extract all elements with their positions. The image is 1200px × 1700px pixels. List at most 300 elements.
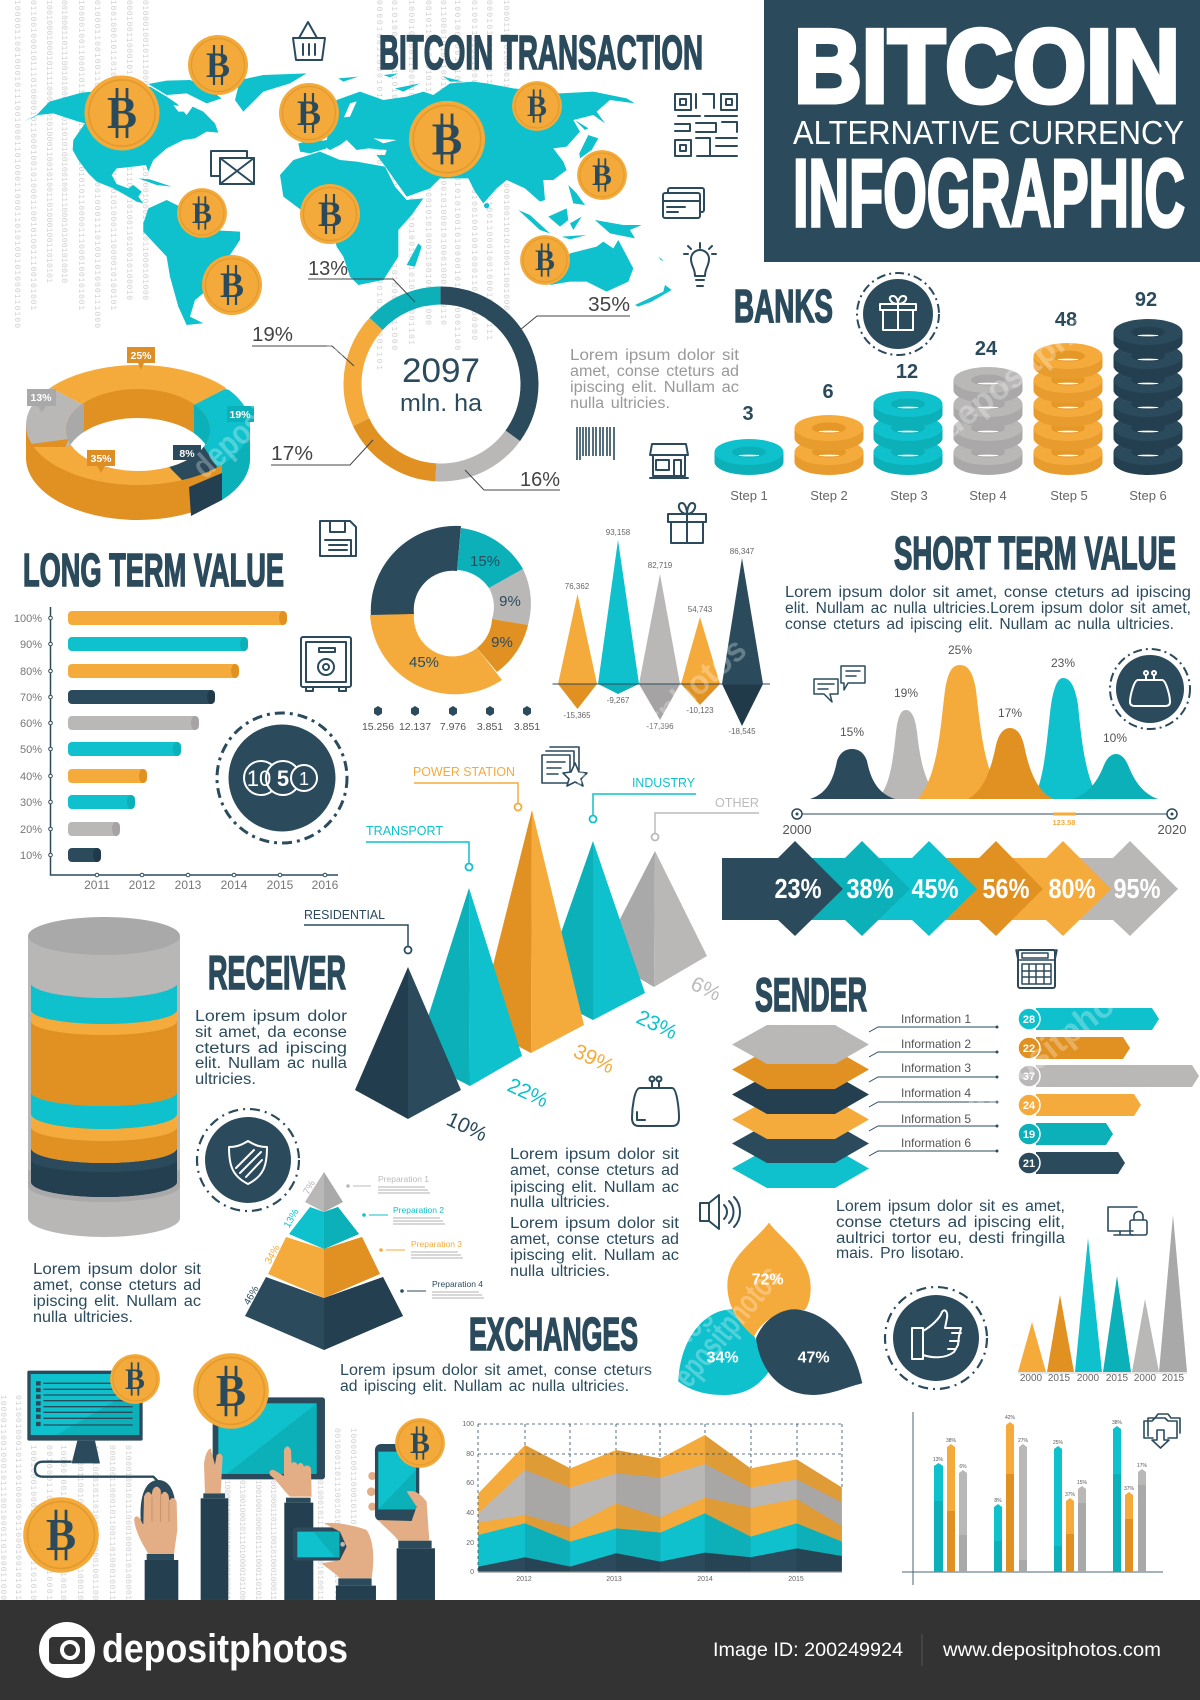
bell curve chart: 17% (998, 706, 1022, 720)
layered pyramid chart: 13% (282, 1207, 302, 1230)
bell curve chart (810, 643, 1158, 799)
horizontal bar chart: 10% (20, 850, 42, 862)
information leader lines: Information 6 (901, 1136, 971, 1150)
arrow bars: 21 (1023, 1158, 1035, 1170)
percent labels: 22% (504, 1074, 552, 1112)
icon: shop (650, 444, 688, 478)
text block: center lorem 2: nulla ultricies. (510, 1263, 610, 1280)
callout: 13%: 13% (30, 392, 52, 404)
text block: receiver: ultricies. (195, 1071, 256, 1088)
horizontal bar chart: 20% (20, 824, 42, 836)
stack: step 4: 24 (975, 338, 998, 360)
label: residential: RESIDENTIAL (304, 908, 385, 922)
watermark overlays: depositphotos (565, 630, 754, 806)
binary code background bottom-left: 011001000101110100001011000100101011 (13, 1395, 22, 1600)
text block: center lorem 2: ipiscing elit. Nullam ac (510, 1247, 679, 1264)
icon: gift (668, 503, 706, 543)
icon: folder download (1144, 1414, 1180, 1448)
grouped bar chart: 17% (1137, 1463, 1148, 1469)
binary code background bottom-left: 10010001011010010010001001100 (90, 1445, 99, 1600)
binary code background top-left: 01100100010111010000101100010010100011001010011100101001 (28, 0, 37, 310)
arrow percent band (722, 841, 1178, 936)
heading: receiver: RECEIVER (208, 946, 346, 999)
stack: step 1 (714, 403, 784, 503)
binary code background bottom-left: 10000100110001011010001001001101 (348, 1428, 357, 1600)
icon badge: coins (217, 713, 347, 843)
layered pyramid chart (242, 1172, 484, 1350)
stack: step 6 (1114, 289, 1182, 503)
spike chart: 76,362 (565, 582, 590, 591)
grouped bar chart: 13% (933, 1457, 944, 1463)
horizontal bar chart: 30% (20, 797, 42, 809)
text block: center lorem 2 (510, 1215, 680, 1280)
hands (134, 1446, 429, 1578)
coins (23, 1353, 445, 1573)
arrow percent band: 56% (982, 873, 1030, 904)
watermark overlays: depositphotos (657, 1258, 789, 1405)
icon badge: coins: 1 (299, 769, 309, 789)
triangle chart: 2000 (1020, 1373, 1043, 1384)
percent labels: 6% (687, 972, 724, 1006)
label: 19%: 19% (252, 324, 293, 346)
spike chart (552, 528, 770, 736)
horizontal bar chart: 2013 (175, 878, 202, 892)
grouped bar chart: 42% (1005, 1415, 1016, 1421)
text block: short term value: elit. Nullam ac nulla ultricies.Lorem ipsum dolor sit amet, (785, 600, 1191, 617)
text block: sender lorem: aultrici tortor eu, desti fringilla (836, 1230, 1065, 1247)
3d donut chart (26, 347, 254, 520)
bell curve chart: 10% (1103, 731, 1127, 745)
icon: mouse (140, 1480, 175, 1525)
arrow bars: 37 (1023, 1071, 1035, 1083)
binary code background bottom-left: 0010001101110010100010001 (44, 1445, 53, 1600)
binary code background top-left: 10010001000101111000110101000110010100110100010011010101 (44, 0, 53, 283)
layered pyramid chart: 7% (301, 1179, 318, 1197)
layered pyramid chart: 34% (263, 1243, 283, 1266)
spike chart: -17,396 (646, 722, 674, 731)
label: preparation 2 (362, 1205, 445, 1224)
timeline: 2000 (783, 822, 811, 837)
label: 13% (308, 258, 415, 302)
stacked area chart: 2013 (606, 1576, 622, 1583)
grouped bar chart: 15% (1077, 1480, 1088, 1486)
binary code background top-left: 10000100110001011010001001001101010110000111000100101001 (76, 0, 85, 310)
binary code background top-center (374, 0, 510, 370)
horizontal bar chart: 2011 (84, 878, 110, 892)
stacked area chart: 2014 (697, 1576, 713, 1583)
text block: center lorem 2: Lorem ipsum dolor sit (510, 1215, 680, 1232)
horizontal bar chart: 2012 (129, 878, 156, 892)
coins: B (216, 1366, 246, 1416)
petal chart: 34% (707, 1349, 739, 1366)
label: 16%: 16% (520, 469, 560, 491)
bitcoin coins on map: B (592, 159, 612, 192)
horizontal bar chart: 80% (20, 666, 42, 678)
watermark overlays: depositphotos (566, 1298, 720, 1436)
icon badge: thumbs up (885, 1287, 987, 1389)
donut ring 2097: mln. ha (400, 390, 483, 417)
label: transport (366, 824, 472, 870)
binary code background top-center: 00001001100010111000110100101001100001010100101010001101 (374, 0, 383, 370)
stacked area chart: 0 (470, 1569, 474, 1576)
donut ring 2097: 2097 (402, 352, 480, 390)
horizontal bar chart: 60% (20, 718, 42, 730)
text block: receiver: sit amet, da econse (195, 1024, 347, 1041)
icon: monitor lock (1108, 1207, 1147, 1235)
timeline: 2020 (1158, 822, 1186, 837)
arrow bars: 22 (1023, 1043, 1035, 1055)
label: 16% (465, 469, 560, 491)
stack: step 4: Step 4 (969, 488, 1007, 503)
text block: center lorem 1 (510, 1146, 680, 1211)
binary code background bottom-left: 10000110010001011100100011 (222, 1480, 231, 1600)
pie donut chart: 15% (470, 553, 500, 570)
horizontal bar chart: 2016 (312, 878, 339, 892)
binary code background bottom-left: 10010001000101111000110101 (253, 1480, 262, 1600)
stack: step 5 (1034, 309, 1102, 503)
grouped bar chart: 37% (1065, 1492, 1076, 1498)
text block: sender lorem: conse cteturs ad ipiscing elit, (836, 1214, 1065, 1231)
timeline (783, 809, 1186, 837)
legend row: 3.851 (477, 721, 503, 733)
stacked area chart: 2015 (788, 1576, 804, 1583)
bitcoin coins on map: B (297, 93, 321, 133)
text block: short term value (785, 584, 1191, 633)
binary code background top-left: 01000110010011000101001100010100010001110100101000111000 (92, 0, 101, 328)
percent labels: 10% (443, 1108, 491, 1146)
triangle chart: 2000 (1134, 1373, 1157, 1384)
stacked area chart: 80 (466, 1451, 474, 1458)
binary code background top-center: 00010100010011010001101001010001010011000100100010100111 (484, 0, 493, 340)
text block: sender lorem (836, 1198, 1065, 1262)
bell curve chart: 19% (894, 686, 918, 700)
text block: grey lorem: amet, conse cteturs ad (570, 363, 739, 380)
legend row: 12.137 (399, 721, 431, 733)
timeline: 123.58 (1053, 818, 1075, 827)
label: 13%: 13% (308, 258, 348, 280)
binary code background bottom-left (0, 1395, 357, 1600)
text block: center lorem 2: amet, conse cteturs ad (510, 1231, 679, 1248)
information leader lines: Information 2 (901, 1037, 971, 1051)
bell curve chart: 15% (840, 725, 864, 739)
stack: step 3 (874, 361, 942, 503)
grouped bar chart: 6% (959, 1464, 967, 1470)
grouped bar chart: 38% (1112, 1420, 1123, 1426)
stacked area chart: 2012 (516, 1576, 532, 1583)
bitcoin coins on map: B (527, 90, 547, 123)
text block: sender lorem: Lorem ipsum dolor sit es amet, (836, 1198, 1065, 1215)
binary code background top-left: 10000110010001011100100011010001100011010100101000110100 (12, 0, 21, 328)
stacked area chart: 100 (462, 1421, 474, 1428)
stack: step 5: 48 (1055, 309, 1077, 331)
text block: receiver: cteturs ad ipiscing (195, 1040, 347, 1057)
text block: short term value: Lorem ipsum dolor sit amet, conse cteturs ad ipiscing (785, 584, 1191, 601)
label: preparation 3 (379, 1239, 463, 1258)
icon: wallet (632, 1076, 679, 1126)
bitcoin coins on map: B (192, 197, 212, 230)
text block: grey lorem: ipiscing elit. Nullam ac (570, 379, 739, 396)
pyramid: industry (540, 841, 645, 1020)
arrow bars: 24 (1023, 1100, 1036, 1112)
spike chart: 82,719 (648, 561, 673, 570)
text block: left lorem: amet, conse cteturs ad (33, 1277, 201, 1294)
grouped bar chart: 8% (994, 1498, 1002, 1504)
text block: center lorem 1: ipiscing elit. Nullam ac (510, 1179, 679, 1196)
label: 35% (520, 294, 630, 330)
stack: step 3: Step 3 (890, 488, 928, 503)
icon: monitor (27, 1371, 143, 1463)
pyramid: power station (478, 810, 584, 1053)
text block: receiver (195, 1008, 347, 1088)
label: power station: POWER STATION (413, 765, 515, 779)
text block: grey lorem: nulla ultricies. (570, 395, 670, 412)
bitcoin coins on map: B (107, 88, 137, 138)
cuffs (147, 1493, 432, 1586)
footer image id: Image ID: 200249924 (713, 1640, 903, 1661)
binary code background bottom-left: 01000100101110001000110100001 (123, 1445, 132, 1600)
pie donut chart: 9% (499, 593, 521, 610)
stack: step 2: Step 2 (810, 488, 848, 503)
arrow percent band: 38% (846, 873, 894, 904)
footer url: www.depositphotos.com (942, 1640, 1161, 1661)
bitcoin coins on map: B (220, 265, 244, 305)
stack: step 6: 92 (1135, 289, 1157, 311)
pie donut chart: 45% (409, 654, 439, 671)
text block: left lorem: ipiscing elit. Nullam ac (33, 1293, 201, 1310)
icon badge: coins: 10 (247, 766, 271, 791)
text block: receiver: Lorem ipsum dolor (195, 1008, 347, 1025)
legend row: 3.851 (514, 721, 540, 733)
grouped bar chart: 25% (1053, 1440, 1064, 1446)
finger blobs behind phone (367, 1472, 376, 1511)
percent labels (443, 972, 724, 1146)
callout: 8% (173, 445, 201, 460)
arrow percent band: 95% (1114, 873, 1161, 904)
binary code background bottom-left: 100100010001011110001101010 (28, 1445, 37, 1600)
text block: left lorem (33, 1261, 202, 1326)
horizontal bar chart: 90% (20, 639, 42, 651)
binary code background top-left: 10010001011010010010001001100011010101000111000010100101 (108, 0, 117, 310)
binary code background top-left: 01000100101110001000110100001011010010001101011000101000 (140, 0, 149, 300)
text block: exchanges: Lorem ipsum dolor sit amet, conse cteturs (340, 1362, 652, 1379)
icon badge: wallet (1110, 649, 1190, 729)
spike chart: -15,365 (563, 711, 591, 720)
icon: lightbulb (684, 243, 716, 286)
icon: calculator (1016, 950, 1057, 988)
icon: safe (301, 637, 351, 691)
text block: exchanges (340, 1362, 652, 1395)
footer bar (0, 1600, 1200, 1700)
binary code background top-center: 10010010010100010100101000110101010010100001010100001100 (452, 0, 461, 350)
binary code background bottom-left: 00010011000101100110100010011 (107, 1445, 116, 1600)
icon: qr code (675, 94, 737, 156)
3d pyramid chart (304, 765, 759, 1146)
label: power station (413, 765, 522, 810)
icon: speaker (700, 1195, 740, 1229)
icon badge: shield (197, 1109, 299, 1211)
label: 35%: 35% (588, 294, 630, 316)
text block: center lorem 1: nulla ultricies. (510, 1194, 610, 1211)
binary code background bottom-left: 00100011011100101000100011010011 (332, 1428, 341, 1600)
label: preparation 3: Preparation 3 (411, 1239, 462, 1249)
icon: chat bubbles (814, 666, 865, 702)
label: residential (304, 908, 412, 954)
title panel: ALTERNATIVE CURRENCY (793, 114, 1184, 151)
stacked area chart (462, 1421, 842, 1583)
petal chart: 72% (752, 1271, 784, 1288)
triangle chart: 2015 (1048, 1373, 1071, 1384)
footer logo (39, 1622, 348, 1678)
spike chart: 93,158 (606, 528, 631, 537)
grouped bar chart: 37% (1124, 1486, 1135, 1492)
horizontal bar chart: 2015 (267, 878, 294, 892)
arrow bars: 19 (1023, 1129, 1035, 1141)
pyramid: transport (415, 888, 522, 1086)
icon badge: coins: 5 (277, 766, 289, 791)
stack: step 2: 6 (822, 381, 834, 403)
heading: sender: SENDER (755, 968, 867, 1021)
icon: small phone (293, 1527, 347, 1561)
coin stacks chart (714, 289, 1182, 503)
binary code background top-left (12, 0, 149, 328)
bell curve chart: 25% (948, 643, 972, 657)
percent labels: 23% (633, 1006, 681, 1044)
information leader lines: Information 3 (901, 1061, 971, 1075)
binary code background bottom-left: 01000110010011000101001100010 (75, 1445, 84, 1600)
callout: 19%: 19% (229, 409, 251, 421)
text block: left lorem: nulla ultricies. (33, 1309, 133, 1326)
watermark overlays (185, 275, 1161, 1436)
bitcoin coins on map: B (318, 194, 342, 234)
triangle chart: 2015 (1106, 1373, 1129, 1384)
pie donut chart (362, 526, 540, 733)
callout: 25%: 25% (130, 350, 152, 362)
stack: step 3: 12 (896, 361, 918, 383)
horizontal bar chart: 100% (14, 613, 42, 625)
stack: step 4 (954, 338, 1022, 503)
hexagon stack (732, 1025, 869, 1188)
label: preparation 4: Preparation 4 (432, 1279, 483, 1289)
text block: grey lorem: Lorem ipsum dolor sit (570, 347, 740, 364)
text block: short term value: conse cteturs ad ipiscing elit. Nullam ac nulla ultricies. (785, 616, 1174, 633)
pie donut chart: 9% (491, 634, 513, 651)
text block: left lorem: Lorem ipsum dolor sit (33, 1261, 202, 1278)
label: preparation 1 (346, 1174, 430, 1193)
heading: banks: BANKS (734, 280, 833, 332)
binary code background top-left: 00010011000101100110100010011001110001010011010010100010 (124, 0, 133, 300)
world map (23, 73, 672, 325)
cylinder chart (28, 917, 180, 1237)
binary code background top-center: 01001101001000110010001010001010100100100100011011100000 (469, 0, 478, 340)
legend row: 7.976 (440, 721, 466, 733)
coins: B (125, 1363, 145, 1396)
spike chart: 54,743 (688, 605, 713, 614)
callout: 19% (227, 406, 254, 422)
icon: floppy disk (320, 521, 356, 556)
text block: center lorem 1: amet, conse cteturs ad (510, 1162, 679, 1179)
grouped bar chart: 27% (1018, 1438, 1029, 1444)
callout: 35% (87, 450, 115, 473)
triangle chart: 2000 (1077, 1373, 1100, 1384)
cable (35, 1462, 158, 1482)
spike chart: 86,347 (730, 547, 755, 556)
binary code background top-center: 10001101010000110100100010010100100010011010100011001000 (501, 0, 510, 310)
text block: exchanges: ad ipiscing elit. Nullam ac nulla ultricies. (340, 1378, 629, 1395)
callout: 25% (127, 347, 155, 370)
arrow percent band: 45% (912, 873, 959, 904)
icon: cards (663, 188, 704, 218)
triangle chart (1018, 1215, 1187, 1384)
information leader lines: Information 5 (901, 1112, 971, 1126)
callout: 13% (27, 389, 56, 413)
label: preparation 1: Preparation 1 (378, 1174, 429, 1184)
stacked area chart: 60 (466, 1480, 474, 1487)
text block: receiver: elit. Nullam ac nulla (195, 1055, 347, 1072)
label: other (652, 796, 759, 840)
stack: step 6: Step 6 (1129, 488, 1167, 503)
stack: step 5: Step 5 (1050, 488, 1088, 503)
donut ring 2097 (252, 258, 630, 491)
petal chart: 47% (798, 1349, 830, 1366)
arrow percent band: 80% (1048, 873, 1096, 904)
pyramid: residential (355, 967, 461, 1119)
title panel (764, 0, 1200, 262)
binary code background top-left: 00100011011100101000100011010100100100111000101001010010 (59, 0, 68, 283)
horizontal bar chart: 50% (20, 744, 42, 756)
stacked area chart: 40 (466, 1510, 474, 1517)
percent labels: 39% (570, 1040, 618, 1078)
heading: bitcoin transaction: BITCOIN TRANSACTION (379, 27, 703, 80)
information leader lines (869, 1012, 998, 1156)
arrow percent band: 23% (774, 873, 822, 904)
label: 19% (252, 324, 354, 366)
coins: B (410, 1427, 430, 1460)
icon badge: gift (857, 273, 939, 355)
triangle chart: 2015 (1162, 1373, 1185, 1384)
watermark overlays: depositphotos (932, 275, 1136, 446)
binary code background top-center: 01100010100100100010111010010100010100010100010001000110 (438, 0, 447, 325)
label: industry (590, 776, 696, 822)
petal chart (678, 1223, 862, 1395)
spike chart: -18,545 (728, 727, 756, 736)
information leader lines: Information 1 (901, 1012, 971, 1026)
bell curve chart: 23% (1051, 656, 1075, 670)
heading: exchanges: EXCHANGES (469, 1308, 638, 1360)
text block: center lorem 1: Lorem ipsum dolor sit (510, 1146, 680, 1163)
icon: basket (293, 22, 325, 60)
label: 17%: 17% (271, 443, 313, 465)
binary code background bottom-left: 01100100010111010000101100 (237, 1480, 246, 1600)
binary code background bottom-left: 100001001100010110100010010 (58, 1445, 67, 1600)
label: other: OTHER (715, 796, 759, 810)
binary code background bottom-left: 100100010001011110001101010011 (315, 1450, 324, 1600)
spike chart: -9,267 (607, 696, 630, 705)
information leader lines: Information 4 (901, 1086, 971, 1100)
text block: sender lorem: mais. Pro lisotaю. (836, 1245, 964, 1262)
stack: step 1: Step 1 (730, 488, 768, 503)
legend row: 15.256 (362, 721, 394, 733)
callout: 8%: 8% (179, 448, 195, 460)
binary code background top-center: 00101100100010110100010100101101000101010001100100101000 (423, 0, 432, 325)
icon: envelopes (211, 151, 254, 184)
footer logo: depositphotos (102, 1627, 348, 1671)
grouped bar chart (902, 1412, 1163, 1585)
watermark overlays: depositphotos (957, 955, 1161, 1126)
grouped bar chart: 38% (946, 1438, 957, 1444)
bitcoin coins on map: B (206, 45, 230, 85)
label: preparation 4 (400, 1279, 484, 1298)
callout: 35%: 35% (90, 453, 112, 465)
